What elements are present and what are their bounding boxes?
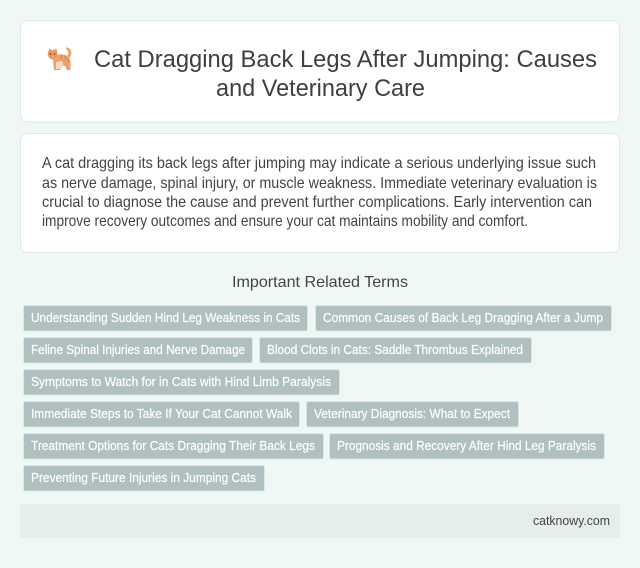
title: and Veterinary Care <box>216 75 425 102</box>
tag list: Common Causes of Back Leg Dragging After a Jump <box>323 310 603 325</box>
tag list: Blood Clots in Cats: Saddle Thrombus Explained <box>267 342 523 357</box>
panel: introduction text: crucial to diagnose the cause and prevent further complications. Early intervention can <box>42 194 592 211</box>
footer <box>20 504 620 538</box>
title: Cat Dragging Back Legs After Jumping: Causes <box>94 46 597 73</box>
tag list: Understanding Sudden Hind Leg Weakness in Cats <box>31 310 300 325</box>
footer: catknowy.com <box>533 513 610 528</box>
tag list: Symptoms to Watch for in Cats with Hind Limb Paralysis <box>31 374 331 389</box>
title <box>94 46 597 102</box>
tag list: Preventing Future Injuries in Jumping Cats <box>31 470 256 485</box>
panel: introduction text: A cat dragging its back legs after jumping may indicate a serious underlying issue such <box>42 155 596 172</box>
tag list: Prognosis and Recovery After Hind Leg Paralysis <box>337 438 596 453</box>
panel: introduction text <box>20 134 620 252</box>
tag list <box>24 306 612 491</box>
panel: introduction text: improve recovery outcomes and ensure your cat maintains mobility and comfort. <box>42 213 528 230</box>
icon: cat <box>48 47 71 70</box>
tag list: Feline Spinal Injuries and Nerve Damage <box>31 342 245 357</box>
tag list: Treatment Options for Cats Dragging Their Back Legs <box>31 438 315 453</box>
heading: related terms: Important Related Terms <box>232 274 408 291</box>
panel: title card <box>20 20 620 122</box>
tag list: Veterinary Diagnosis: What to Expect <box>314 406 510 421</box>
tag list: Immediate Steps to Take If Your Cat Cannot Walk <box>31 406 292 421</box>
